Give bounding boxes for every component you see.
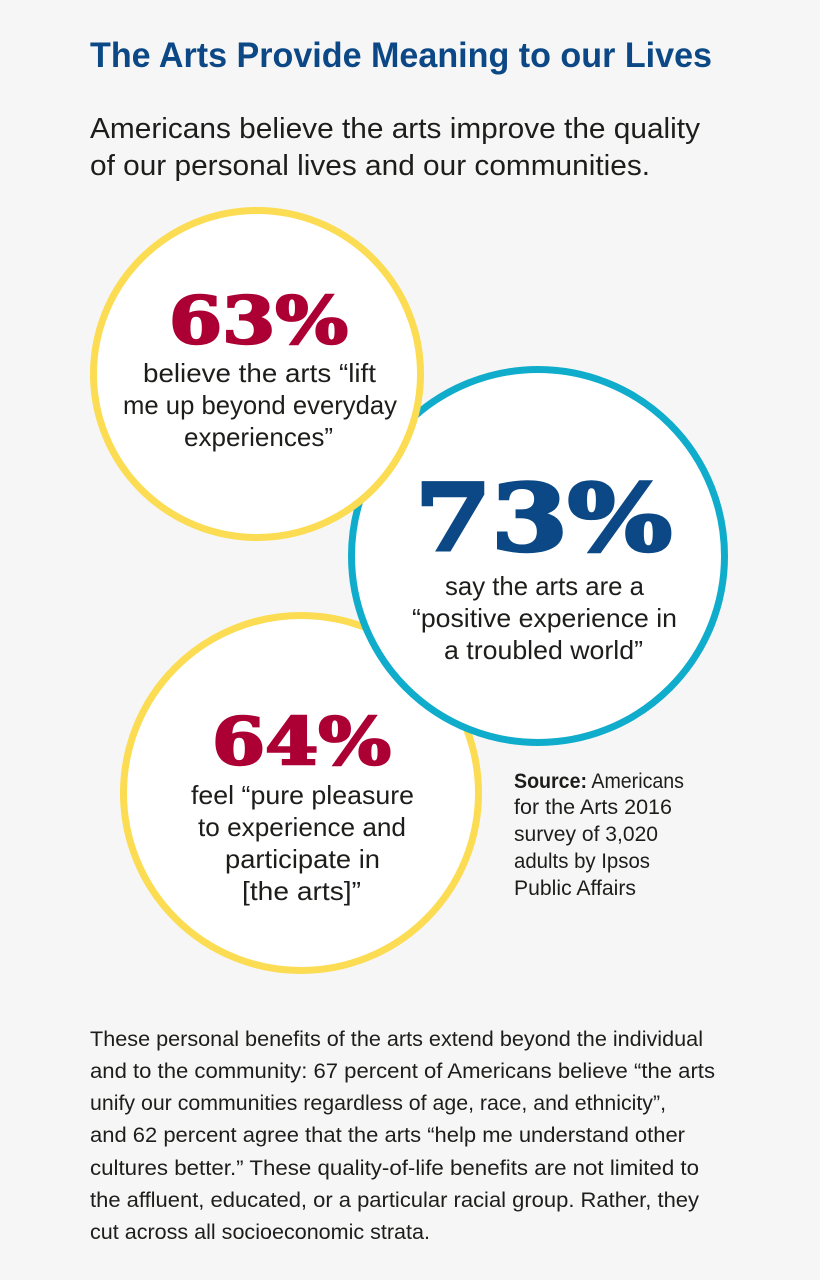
closing paragraph: the affluent, educated, or a particular racial group. Rather, they	[90, 1188, 699, 1212]
circle: 63% stat	[94, 210, 420, 538]
source note: Public Affairs	[514, 877, 636, 900]
closing paragraph: cut across all socioeconomic strata.	[90, 1220, 430, 1244]
stat description: 63%: me up beyond everyday	[123, 390, 397, 420]
stat description: 64%: to experience and	[198, 812, 406, 842]
circle: 64% stat	[124, 616, 478, 970]
stat description: 64%	[191, 780, 414, 906]
stat description: 73%: “positive experience in	[412, 603, 677, 633]
closing paragraph: cultures better.” These quality-of-life benefits are not limited to	[90, 1156, 699, 1180]
stat description: 63%: experiences”	[184, 422, 333, 452]
source note: adults by Ipsos	[514, 850, 650, 873]
closing paragraph: These personal benefits of the arts extend beyond the individual	[90, 1027, 703, 1051]
closing paragraph: and to the community: 67 percent of Americans believe “the arts	[90, 1059, 715, 1083]
subtitle: of our personal lives and our communities.	[90, 150, 650, 182]
stat description: 73%: say the arts are a	[445, 571, 645, 601]
stat description: 64%: participate in	[225, 844, 380, 874]
closing paragraph: unify our communities regardless of age, race, and ethnicity”,	[90, 1091, 666, 1115]
stat number: 73%: 73%	[415, 464, 672, 572]
stat description: 63%	[123, 358, 397, 452]
stat description: 73%: a troubled world”	[444, 635, 643, 665]
subtitle	[90, 113, 701, 182]
subtitle: Americans believe the arts improve the quality	[90, 113, 701, 145]
stat number: 63%: 63%	[169, 283, 348, 359]
stat number: 64%: 64%	[212, 704, 391, 780]
circle: 73% stat	[352, 370, 724, 742]
source note: Source: Americans	[514, 770, 684, 793]
stat description: 63%: believe the arts “lift	[143, 358, 377, 388]
source note: survey of 3,020	[514, 823, 658, 846]
closing paragraph	[90, 1027, 715, 1244]
source note	[514, 770, 684, 900]
stat description: 73%	[412, 571, 677, 665]
stat description: 64%: [the arts]”	[242, 876, 361, 906]
closing paragraph: and 62 percent agree that the arts “help me understand other	[90, 1123, 685, 1147]
source note: for the Arts 2016	[514, 796, 672, 819]
stat description: 64%: feel “pure pleasure	[191, 780, 414, 810]
title: The Arts Provide Meaning to our Lives	[90, 36, 712, 75]
